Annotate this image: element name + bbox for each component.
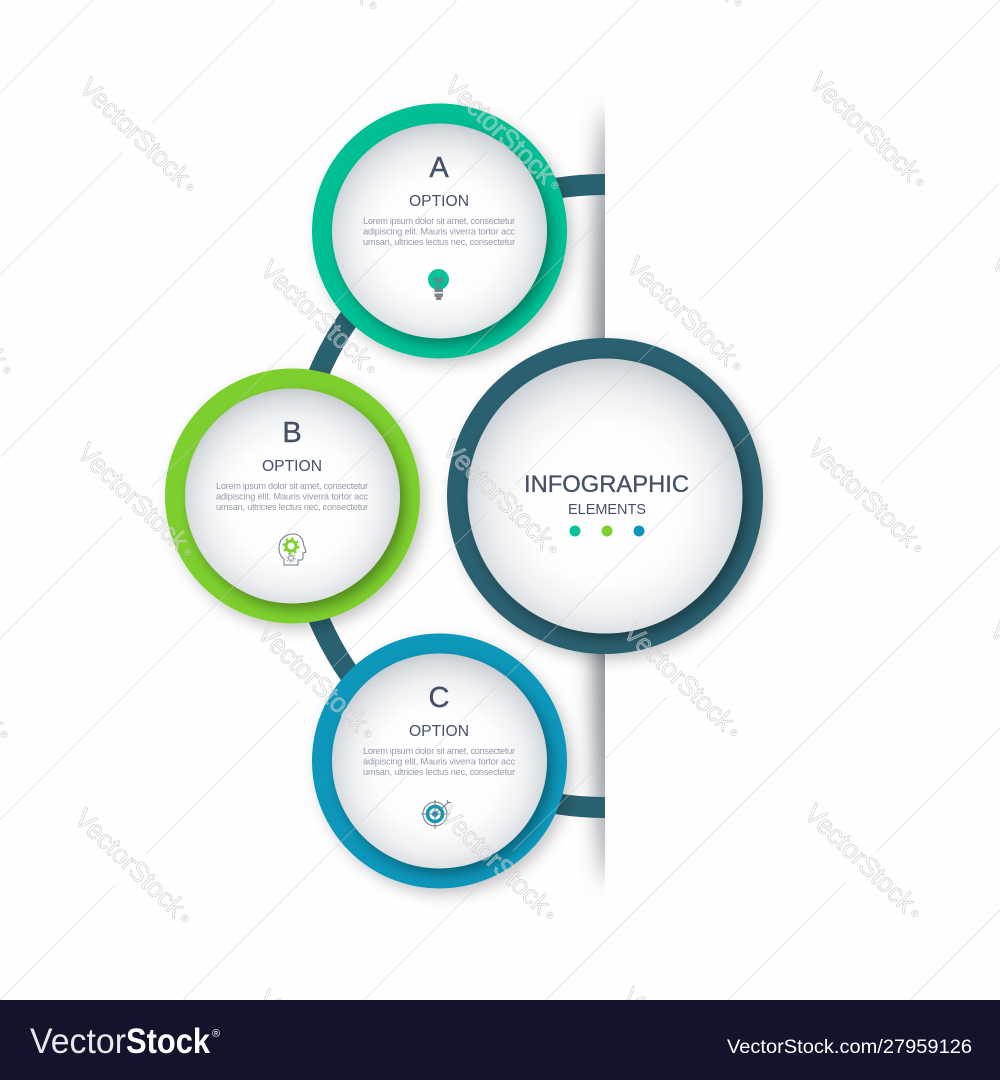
watermarks: ® [361,727,374,741]
watermarks: VectorStock [434,800,556,920]
C body text: umsan, ultricies lectus nec, consectetur [363,767,515,777]
B heading: OPTION [262,458,322,475]
watermarks: VectorStock [439,70,561,190]
icon: head with gears [279,534,306,565]
watermarks: ® [548,179,561,193]
watermarks: VectorStock [255,254,377,374]
C body text: adipiscing elit. Mauris viverra tortor acc [363,756,515,766]
watermarks: VectorStock [799,798,921,918]
central title: INFOGRAPHIC [524,471,689,498]
footer logo: ® [212,1028,220,1040]
watermarks: ® [543,909,556,923]
A letter: A [429,152,449,184]
watermarks: VectorStock [618,617,740,737]
connector arc [294,184,605,808]
icon: target [421,800,451,829]
watermarks: VectorStock [72,437,194,557]
B disc [185,388,400,604]
watermarks: ® [727,726,740,740]
watermarks: ® [546,543,559,557]
C disc [332,654,547,868]
watermarks: VectorStock [621,251,743,371]
A body text [363,216,515,247]
B letter: B [282,417,302,449]
A disc [332,124,547,338]
A ring [312,104,567,358]
watermarks: ® [178,912,191,926]
C heading: OPTION [409,723,469,740]
A heading: OPTION [409,193,469,210]
fold shadow [578,107,605,885]
panel: option C [312,634,567,888]
A body text: Lorem ipsum dolor sit amet, consectetur [363,216,515,226]
panel: option A [312,104,567,358]
B body text [216,481,368,512]
central disc [468,358,742,634]
panel: central circle [447,338,763,654]
B body text: Lorem ipsum dolor sit amet, consectetur [216,481,368,491]
watermarks: VectorStock [802,433,924,553]
watermarks: ® [364,363,377,377]
C letter: C [429,682,449,714]
B ring [165,368,420,624]
watermarks: ® [911,542,924,556]
A body text: umsan, ultricies lectus nec, consectetur [363,237,515,247]
watermarks: ® [913,176,926,190]
B body text: umsan, ultricies lectus nec, consectetur [216,502,368,512]
C ring [312,634,567,888]
A body text: adipiscing elit. Mauris viverra tortor acc [363,226,515,236]
icon: light bulb [428,269,449,300]
central ring [447,338,763,654]
watermarks: ® [0,364,13,378]
footer logo: Vector [30,1022,126,1061]
footer logo [30,1022,220,1061]
watermarks: VectorStock [74,72,196,192]
footer bar [0,1000,1000,1080]
watermarks: ® [181,546,194,560]
watermarks: VectorStock [804,67,926,187]
watermarks: VectorStock [69,803,191,923]
watermarks: VectorStock [437,434,559,554]
central subtitle: ELEMENTS [568,501,646,518]
footer image id: VectorStock.com/27959126 [727,1037,972,1058]
watermarks: ® [183,181,196,195]
panel: option B [165,368,420,624]
three colored dots [570,526,644,536]
C body text: Lorem ipsum dolor sit amet, consectetur [363,746,515,756]
watermarks: ® [730,360,743,374]
B body text: adipiscing elit. Mauris viverra tortor acc [216,492,368,502]
watermarks: VectorStock [252,618,374,738]
footer logo: Stock [126,1022,210,1061]
watermarks: ® [908,907,921,921]
C body text [363,746,515,777]
